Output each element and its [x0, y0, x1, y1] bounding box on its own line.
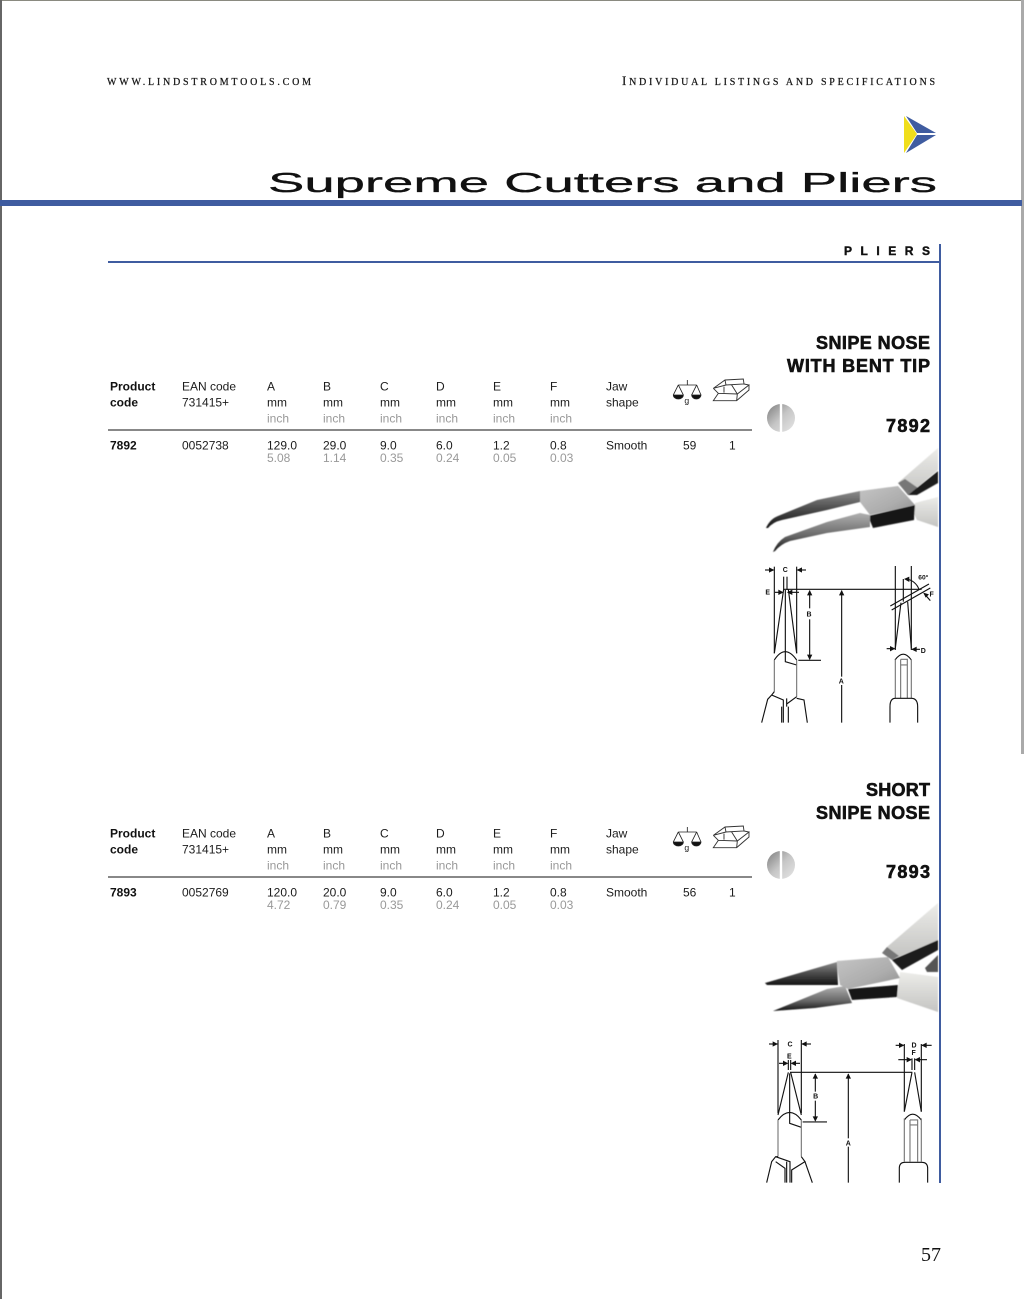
heading: short snipe nose: SNIPE NOSE — [816, 803, 930, 823]
diagram: dimensions 7892: F — [930, 592, 935, 599]
table row: 0.24 — [436, 451, 460, 465]
header: section note: I NDIVIDUAL LISTINGS AND SPECIFICATIONS — [622, 73, 935, 88]
table row: 0052738 — [182, 438, 229, 452]
table row: 0.03 — [550, 898, 574, 912]
table header: mm — [436, 395, 456, 409]
icon: box — [713, 826, 749, 848]
diagram: dimensions 7892: C — [783, 567, 788, 574]
diagram: dimensions 7892: E — [765, 590, 770, 597]
table header: F — [550, 826, 557, 840]
table header: mm — [493, 395, 513, 409]
table header: inch — [380, 858, 402, 872]
table row: 0.05 — [493, 451, 517, 465]
table header: Product — [110, 379, 155, 393]
icon: weight scales — [673, 827, 701, 852]
icon: weight scales: g — [684, 842, 689, 852]
table row: 7892 — [110, 438, 137, 452]
table header: E — [493, 826, 501, 840]
header: website: WWW.LINDSTROMTOOLS.COM — [107, 77, 311, 88]
table header: C — [380, 826, 389, 840]
table row: 4.72 — [267, 898, 291, 912]
table row: 1.14 — [323, 451, 347, 465]
table row: 6.0 — [436, 885, 453, 899]
table header: inch — [380, 411, 402, 425]
table row: 9.0 — [380, 885, 397, 899]
table header: D — [436, 826, 445, 840]
table header: D — [436, 379, 445, 393]
table row: 0.24 — [436, 898, 460, 912]
table header: Jaw — [606, 379, 628, 393]
table row: 0.03 — [550, 451, 574, 465]
table header: mm — [380, 395, 400, 409]
table row: Smooth — [606, 885, 647, 899]
table header — [110, 826, 639, 872]
table header: shape — [606, 842, 639, 856]
table header: 731415+ — [182, 842, 229, 856]
table row: 129.0 — [267, 438, 297, 452]
table row: 59 — [683, 438, 697, 452]
table header: inch — [436, 411, 458, 425]
table header: mm — [267, 395, 287, 409]
diagram: dimensions 7892: A — [839, 678, 844, 685]
table header: mm — [380, 842, 400, 856]
product number 7893: 7893 — [886, 862, 930, 882]
table header: inch — [323, 858, 345, 872]
header rule — [0, 200, 1022, 206]
table header: A — [267, 826, 275, 840]
table header: EAN code — [182, 379, 236, 393]
table header: A — [267, 379, 275, 393]
page number: 57 — [921, 1244, 941, 1266]
table row: 120.0 — [267, 885, 297, 899]
table header: F — [550, 379, 557, 393]
table header: mm — [323, 842, 343, 856]
table row — [110, 885, 736, 912]
table row: 7893 — [110, 885, 137, 899]
table header: mm — [550, 395, 570, 409]
table header: inch — [493, 858, 515, 872]
heading: snipe nose with bent tip — [787, 333, 930, 376]
table row: 1.2 — [493, 438, 510, 452]
table header: inch — [267, 858, 289, 872]
diagram: dimensions 7892: 60° — [918, 573, 929, 581]
table header: B — [323, 379, 331, 393]
table header: inch — [436, 858, 458, 872]
table row: 0.35 — [380, 451, 404, 465]
table header: shape — [606, 395, 639, 409]
title: Supreme Cutters and Pliers — [268, 167, 937, 198]
table header: mm — [493, 842, 513, 856]
diagram: dimensions 7893 — [767, 1040, 932, 1183]
heading: snipe nose with bent tip: WITH BENT TIP — [787, 356, 930, 376]
table row: 1 — [729, 885, 736, 899]
diagram: dimensions 7892: D — [921, 648, 926, 655]
table header: inch — [550, 411, 572, 425]
table header — [110, 379, 639, 425]
icon: logo arrow — [904, 116, 936, 153]
table header: inch — [550, 858, 572, 872]
table row: 6.0 — [436, 438, 453, 452]
table row: 0.05 — [493, 898, 517, 912]
table row: 5.08 — [267, 451, 291, 465]
table row: 29.0 — [323, 438, 347, 452]
table header: C — [380, 379, 389, 393]
table header: B — [323, 826, 331, 840]
icon: jaw shape 7892 — [767, 403, 795, 433]
table header: mm — [323, 395, 343, 409]
panel: product 7892 table — [108, 379, 752, 465]
table row: 20.0 — [323, 885, 347, 899]
diagram: dimensions 7893: A — [846, 1140, 851, 1147]
table header: 731415+ — [182, 395, 229, 409]
table header: E — [493, 379, 501, 393]
section rules — [108, 244, 941, 1183]
table header: inch — [493, 411, 515, 425]
photo: pliers 7892 — [766, 448, 938, 552]
heading: short snipe nose: SHORT — [866, 780, 930, 800]
table header: inch — [323, 411, 345, 425]
table header: EAN code — [182, 826, 236, 840]
table header: mm — [436, 842, 456, 856]
diagram: dimensions 7892: B — [806, 612, 812, 619]
icon: weight scales: g — [684, 395, 689, 405]
table row: 1 — [729, 438, 736, 452]
table row: 1.2 — [493, 885, 510, 899]
diagram: dimensions 7892 — [762, 566, 935, 723]
table row: 0.8 — [550, 438, 567, 452]
diagram: dimensions 7893: D — [911, 1042, 917, 1049]
table row: 0.35 — [380, 898, 404, 912]
diagram: dimensions 7893: C — [787, 1041, 793, 1048]
icon: jaw shape 7893 — [767, 850, 795, 880]
heading: snipe nose with bent tip: SNIPE NOSE — [816, 333, 930, 353]
table row: Smooth — [606, 438, 647, 452]
heading: short snipe nose — [816, 780, 930, 823]
table rule — [108, 876, 752, 878]
table header: inch — [267, 411, 289, 425]
table row: 56 — [683, 885, 697, 899]
icon: box — [713, 379, 749, 401]
diagram: dimensions 7893: E — [787, 1053, 792, 1060]
panel: product 7893 table — [108, 826, 752, 912]
table rule — [108, 429, 752, 431]
table row: 0052769 — [182, 885, 229, 899]
table header: mm — [267, 842, 287, 856]
photo: pliers 7893 — [765, 903, 938, 1012]
product number 7892: 7892 — [886, 416, 930, 436]
icon: weight scales — [673, 380, 701, 405]
section heading: PLIERS — [844, 244, 930, 258]
table header: code — [110, 842, 138, 856]
table header: Jaw — [606, 826, 628, 840]
table header: Product — [110, 826, 155, 840]
table row: 9.0 — [380, 438, 397, 452]
table row: 0.79 — [323, 898, 347, 912]
table row — [110, 438, 736, 465]
diagram: dimensions 7893: F — [912, 1050, 917, 1057]
table header: mm — [550, 842, 570, 856]
table row: 0.8 — [550, 885, 567, 899]
diagram: dimensions 7893: B — [813, 1094, 818, 1101]
table header: code — [110, 395, 138, 409]
